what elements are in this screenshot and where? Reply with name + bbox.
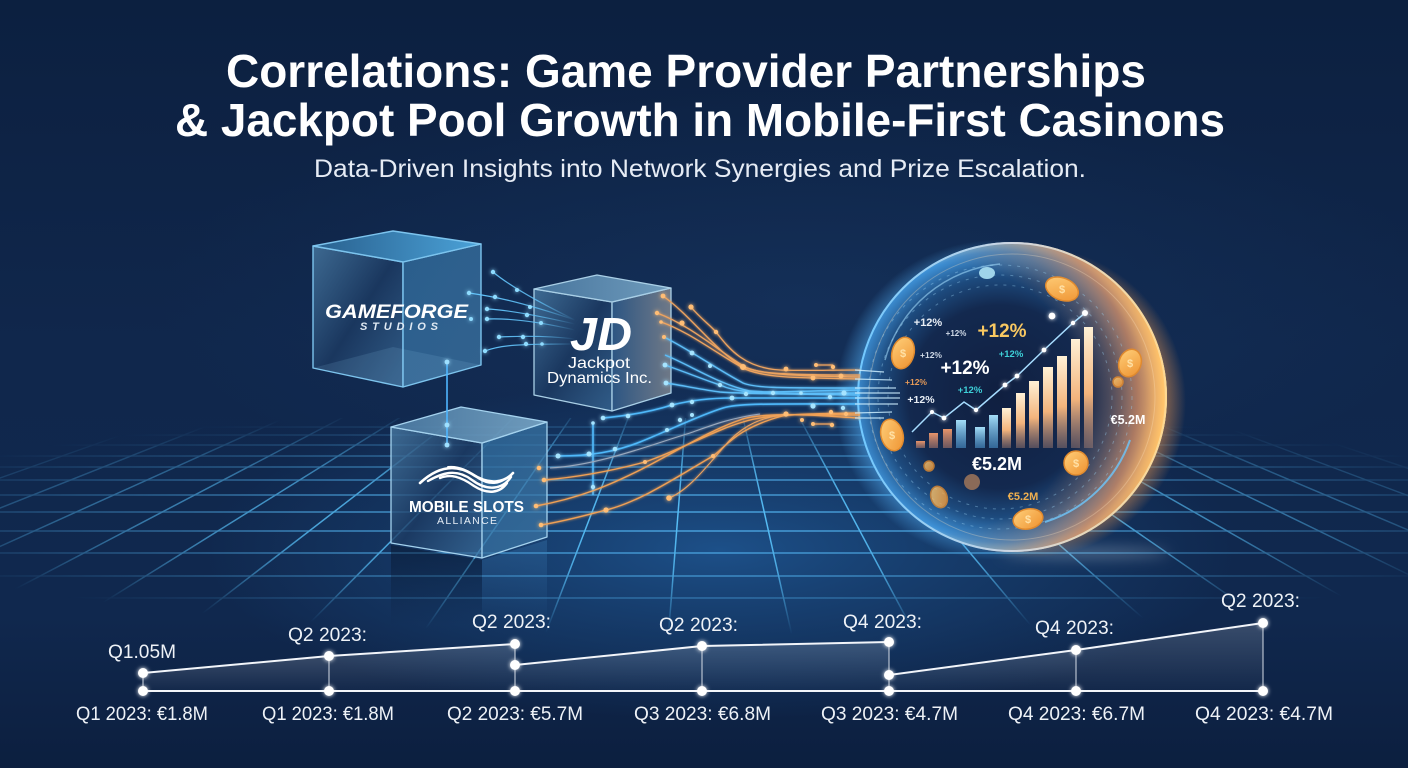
percentage labels: +12% <box>958 385 983 396</box>
JD logo: JD <box>570 308 632 360</box>
lower labels: Q1 2023: €1.8M <box>76 704 208 725</box>
logo text: GAMEFORGE <box>325 302 470 323</box>
blue streams from Jackpot Dynamics <box>664 337 860 395</box>
upper labels: Q1.05M <box>108 642 176 663</box>
connector: Gameforge to Mobile Slots vertical link <box>445 360 449 447</box>
connectors: network streams into sphere <box>534 294 900 527</box>
title line 2: & Jackpot Pool Growth in Mobile-First Casinons <box>175 94 1225 146</box>
jackpot value labels: €5.2M <box>1008 491 1038 503</box>
coins <box>877 267 1145 532</box>
orange streams from Mobile Slots <box>536 413 860 525</box>
jackpot value labels: €5.2M <box>972 454 1022 474</box>
jackpot pool sphere <box>835 240 1186 560</box>
wave logo <box>420 467 513 492</box>
jackpot value labels: €5.2M <box>1111 413 1145 427</box>
upper labels: Q2 2023: <box>288 625 367 646</box>
perspective floor grid <box>0 418 1408 630</box>
orange streams from Jackpot Dynamics <box>657 296 860 424</box>
company name: Dynamics Inc. <box>547 370 652 387</box>
lower labels: Q2 2023: €5.7M <box>447 704 583 725</box>
lower labels <box>76 704 1333 725</box>
percentage labels <box>905 317 1027 406</box>
timeline chart <box>76 591 1333 725</box>
lower labels: Q4 2023: €4.7M <box>1195 704 1333 725</box>
trend and baseline lines <box>143 623 1263 691</box>
upper labels: Q2 2023: <box>1221 591 1300 612</box>
logo text <box>325 302 470 333</box>
percentage labels: +12% <box>977 321 1027 342</box>
coin dollar signs <box>889 284 1133 526</box>
coin dollar signs: $ <box>889 430 895 442</box>
upper labels: Q2 2023: <box>659 615 738 636</box>
lower labels: Q4 2023: €6.7M <box>1008 704 1145 725</box>
cube: Gameforge Studios <box>313 231 481 387</box>
upper labels: Q2 2023: <box>472 612 551 633</box>
area fills <box>143 623 1263 691</box>
cube: Mobile Slots Alliance <box>391 407 547 558</box>
coin dollar signs: $ <box>1073 458 1079 470</box>
percentage labels: +12% <box>914 317 942 329</box>
floor flare beneath sphere <box>1000 549 1170 557</box>
bar chart <box>916 327 1093 448</box>
logo text: STUDIOS <box>360 321 439 333</box>
company name: MOBILE SLOTS <box>409 499 524 516</box>
connectors: Gameforge to Jackpot Dynamics <box>467 270 575 353</box>
title <box>175 45 1225 146</box>
cube faces <box>391 407 547 558</box>
upper labels: Q4 2023: <box>1035 618 1114 639</box>
lower labels: Q3 2023: €4.7M <box>821 704 958 725</box>
coin dollar signs: $ <box>1025 514 1031 526</box>
percentage labels: +12% <box>905 377 927 387</box>
trend line <box>912 310 1088 432</box>
data points <box>138 618 1268 696</box>
percentage labels: +12% <box>907 394 935 406</box>
blue nodes <box>556 351 847 489</box>
bright beams at sphere edge <box>855 370 900 418</box>
company name <box>547 355 652 387</box>
coin dollar signs: $ <box>1059 284 1065 296</box>
percentage labels: +12% <box>920 350 942 360</box>
company name <box>409 499 524 527</box>
cube faces <box>534 275 671 411</box>
subtitle: Data-Driven Insights into Network Synergies and Prize Escalation. <box>314 155 1086 183</box>
percentage labels: +12% <box>999 349 1024 360</box>
upper labels: Q4 2023: <box>843 612 922 633</box>
cube: Jackpot Dynamics Inc. <box>534 275 671 411</box>
orange nodes <box>534 294 848 527</box>
sphere glow <box>835 240 1155 560</box>
upper labels <box>108 591 1300 663</box>
company name: ALLIANCE <box>437 515 497 527</box>
lower labels: Q1 2023: €1.8M <box>262 704 394 725</box>
reflection and shadow of Mobile Slots cube <box>391 540 547 625</box>
percentage labels: +12% <box>940 358 990 379</box>
blue streams from lower cube <box>558 398 860 495</box>
cube faces <box>313 231 481 387</box>
sphere body <box>857 242 1167 552</box>
coin dollar signs: $ <box>900 348 906 360</box>
lower labels: Q3 2023: €6.8M <box>634 704 771 725</box>
jackpot value labels <box>972 413 1145 503</box>
title line 1: Correlations: Game Provider Partnerships <box>226 45 1146 97</box>
coin dollar signs: $ <box>1127 358 1133 370</box>
percentage labels: +12% <box>946 329 966 338</box>
company name: Jackpot <box>568 355 631 372</box>
